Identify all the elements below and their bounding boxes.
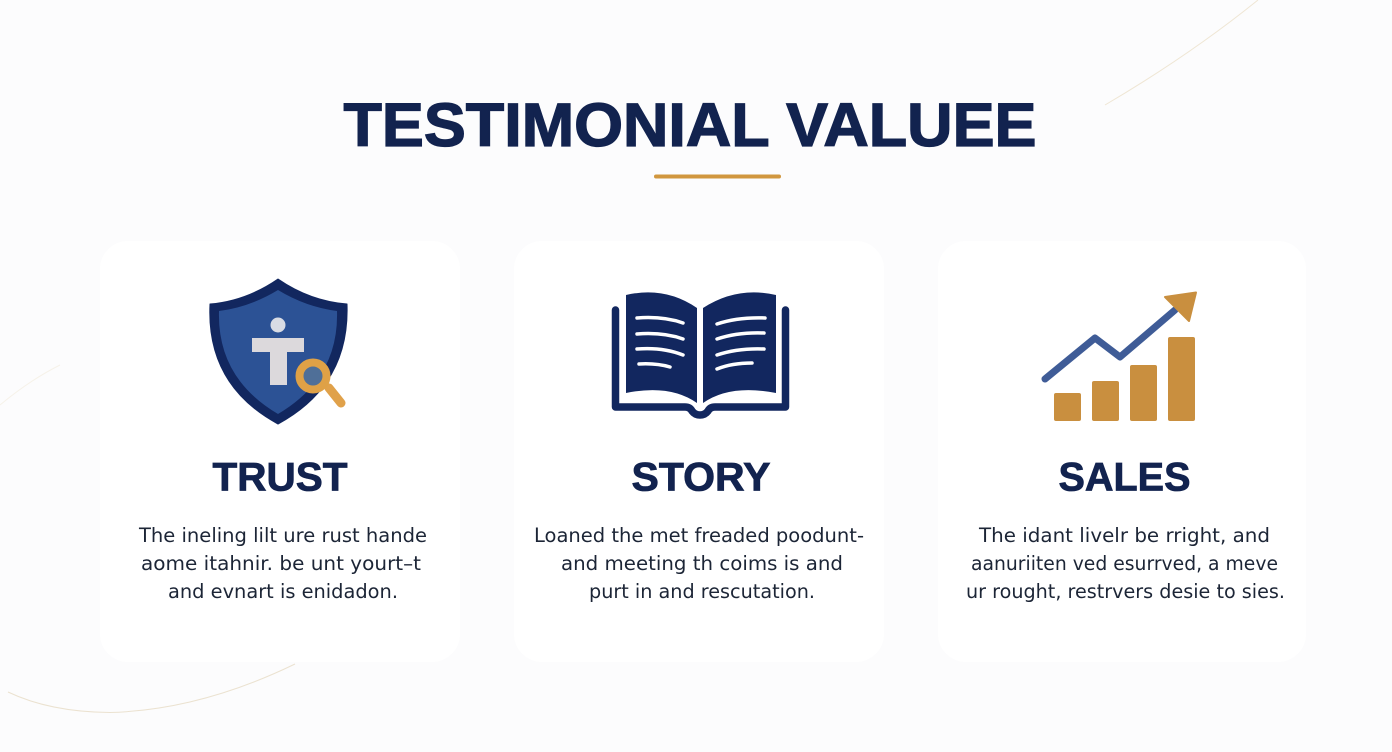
- story body text: and meeting th coims is and: [561, 552, 843, 575]
- trust body text: aome itahnir. be unt yourt–t: [141, 552, 421, 575]
- story body text: Loaned the met freaded poodunt-: [534, 524, 864, 547]
- story body text: purt in and rescutation.: [589, 580, 815, 603]
- trust body text: The ineling lilt ure rust hande: [138, 524, 427, 547]
- sales body text: ur rought, restrvers desie to sies.: [966, 580, 1285, 603]
- icon: rising bar chart with arrow: [1045, 292, 1196, 421]
- story heading: STORY: [632, 456, 771, 500]
- sales card background: [938, 241, 1306, 662]
- title: TESTIMONIAL VALUEE: [344, 91, 1036, 159]
- sales body text: [966, 524, 1285, 603]
- trust card background: [100, 241, 460, 662]
- sales body text: aanuriiten ved esurrved, a meve: [971, 552, 1278, 575]
- icon: shield with person and magnifier: [210, 279, 347, 424]
- title underline: [654, 174, 781, 178]
- sales body text: The idant livelr be rright, and: [978, 524, 1270, 547]
- panel: sales: [938, 241, 1306, 662]
- panel: trust: [100, 241, 460, 662]
- story body text: [534, 524, 864, 603]
- icon: open book: [616, 292, 786, 415]
- trust body text: [138, 524, 427, 603]
- trust heading: TRUST: [212, 456, 348, 500]
- story card background: [514, 241, 884, 662]
- panel: story: [514, 241, 884, 662]
- trust body text: and evnart is enidadon.: [168, 580, 398, 603]
- sales heading: SALES: [1058, 456, 1190, 500]
